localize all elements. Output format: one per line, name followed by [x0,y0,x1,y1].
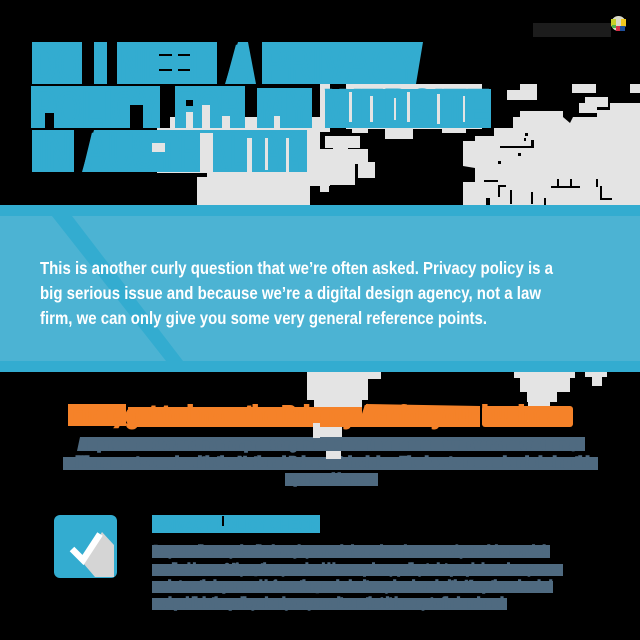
title line 3: IN [33,124,73,182]
title line 1: DO [33,36,81,94]
icon shadow [83,532,114,577]
band diagonal stripe [52,216,183,361]
intro paragraph: open and honest. [287,471,376,486]
icon: checkmark [54,515,117,578]
orange heading: First, get to know the Privacy Act for your business [70,402,571,429]
title line 1 [33,36,421,94]
title line 1: A [226,36,254,94]
title backing blocks [31,42,491,172]
section heading bar [152,515,320,533]
section heading [152,515,320,534]
section heading text: PRIVACY POLICY CHECK [154,517,318,534]
section body text [154,544,562,610]
title line 2: POLICY [33,80,159,138]
intro band [0,205,640,372]
icon tick [72,534,100,560]
world map [157,84,640,409]
band inner [0,216,640,361]
intro paragraph: All private sector and not-for-profit organisations with an annual turnover of more than $3 [79,437,583,452]
title line 2: MY [258,80,311,138]
intro text: firm, we can only give you some very general reference points. [40,308,487,328]
title letter gaps [45,54,465,172]
map cracks [484,133,612,205]
section body text: and publish the policy clearly on your site so that it is easy to find and read. [154,596,506,610]
title line 1: PRIVACY [263,36,421,94]
title line 2: FOR [176,80,244,138]
title line 2: WEBSITE [326,80,490,138]
band outer [0,205,640,372]
intro text: This is another curly question that we’re often asked. Privacy policy is a [40,258,553,278]
orange heading backing [68,404,573,427]
intro text [40,258,553,328]
intro paragraph: million, must comply with the National Privacy Principles. The key to remember is being this [65,454,596,469]
title line 3: AUSTRALIA? [83,124,306,182]
logo wordmark bar [533,23,611,37]
intro paragraph backing [63,437,598,486]
section heading word gap [222,516,224,526]
intro text: big serious issue and because we’re a digital design agency, not a law [40,283,541,303]
logo [533,16,626,37]
logo badge [611,16,626,31]
icon tile [54,515,117,578]
title line 1: I [94,36,106,94]
title line 2 [33,80,490,138]
intro paragraph [65,437,596,486]
title line 1: NEED [118,36,216,94]
title [33,36,490,182]
section body backing [152,545,563,610]
map overlay on text [313,423,342,459]
map: lower landmass left [307,370,381,379]
title line 3 [33,124,306,182]
